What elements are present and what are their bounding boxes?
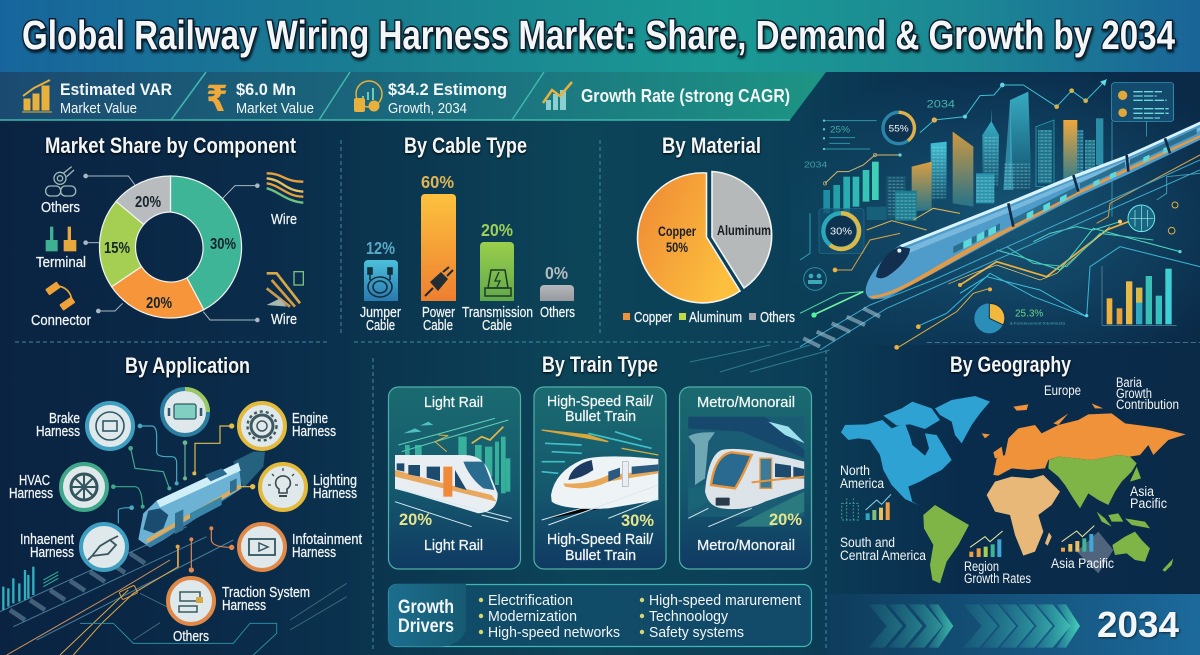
donut values: 20% — [146, 295, 172, 312]
card: high speed rail: High-Speed Rail/ — [547, 532, 654, 548]
map labels: Region — [964, 559, 999, 574]
KPI: market value: $6.0 Mn — [236, 80, 296, 99]
world map — [841, 396, 1186, 583]
map labels: North — [840, 463, 870, 478]
bar labels: Jumper — [360, 305, 401, 321]
bar labels: Transmission — [462, 305, 533, 321]
map labels: Growth — [1116, 386, 1152, 401]
card: metro monorail: Metro/Monorail — [697, 395, 795, 411]
mini chart icons — [842, 494, 1094, 557]
heading: By Geography — [950, 352, 1072, 377]
map labels: Europe — [1044, 383, 1081, 398]
icon: harness connector — [81, 524, 127, 570]
driver list: Safety systems — [649, 625, 744, 641]
panel: by material — [623, 133, 795, 326]
track — [800, 160, 1200, 350]
bar labels: Cable — [482, 318, 512, 334]
ring 55%: 55% — [889, 123, 909, 133]
labels: HVAC — [19, 473, 50, 489]
labels: Brake — [49, 411, 80, 427]
driver list — [488, 593, 801, 641]
labels: Harness — [9, 486, 53, 502]
legend: Copper — [634, 310, 672, 326]
icon: infotainment screen — [239, 524, 285, 570]
icon: power plug — [425, 267, 453, 296]
labels: Lighting — [313, 473, 357, 489]
right bar chart — [1102, 266, 1177, 325]
pie chart — [638, 172, 772, 303]
icon: HVAC wheel — [61, 464, 107, 510]
labels: Traction System — [222, 585, 310, 601]
heading: By Material — [662, 133, 761, 158]
panel: by application — [0, 353, 362, 655]
card: high speed rail: High-Speed Rail/ — [547, 394, 654, 410]
icon: engine harness gear — [239, 403, 285, 449]
card: high speed rail: Bullet Train — [565, 409, 636, 425]
icon: jumper cable — [368, 268, 392, 297]
icon: terminals — [46, 227, 76, 251]
map labels: Growth Rates — [964, 571, 1031, 586]
legend: Aluminum — [689, 310, 742, 326]
bar labels — [360, 305, 575, 334]
rising trend line — [920, 79, 1107, 133]
circuit lines — [800, 155, 1200, 350]
hero glow — [790, 70, 1200, 345]
card: light rail: Light Rail — [424, 538, 483, 554]
icon: cable coils — [46, 167, 76, 196]
icon: transmission drive — [485, 270, 511, 296]
people icon — [804, 268, 826, 290]
KPI: growth rate: Growth Rate (strong CAGR) — [581, 86, 790, 106]
KPI: forecast: $34.2 Estimong — [388, 80, 507, 99]
ring 30% — [819, 209, 864, 254]
speed lines — [690, 345, 830, 372]
card: metro monorail: Metro/Monorail — [697, 538, 795, 554]
heading — [398, 596, 454, 637]
icon: traction system — [168, 578, 214, 624]
driver list: Technoology — [649, 609, 729, 625]
values: 0% — [545, 263, 568, 283]
KPI: market value: ₹ — [206, 79, 228, 120]
labels: Terminal — [36, 255, 86, 271]
chevrons — [868, 604, 1080, 648]
train — [138, 452, 265, 547]
map labels: Asia — [1130, 484, 1154, 499]
icon: wiring loom — [267, 272, 303, 307]
labels: Inhaenent — [20, 532, 74, 548]
panel: by cable type — [360, 133, 575, 334]
map labels: Central America — [840, 548, 926, 563]
map labels: South and — [840, 535, 895, 550]
KPI: forecast: Growth, 2034 — [388, 101, 467, 117]
labels: Others — [41, 200, 80, 216]
panel: by train type — [388, 345, 830, 569]
labels: Harness — [292, 424, 336, 440]
title banner — [0, 0, 1200, 72]
icon: connector — [45, 281, 75, 311]
skyline — [867, 92, 1103, 221]
globe chip — [1128, 205, 1155, 232]
icon: engine — [162, 389, 208, 435]
donut values: 15% — [104, 240, 130, 257]
labels — [31, 200, 297, 329]
card: metro monorail — [680, 387, 812, 569]
footer band — [827, 594, 1200, 655]
label 2034 left: 2034 — [804, 160, 828, 170]
dashboard panel — [1112, 83, 1174, 217]
KPI strip — [0, 72, 826, 120]
values: 60% — [421, 172, 454, 192]
labels: Harness — [36, 424, 80, 440]
card: metro monorail: 20% — [769, 510, 802, 529]
labels — [9, 411, 362, 645]
panel: market share by component — [31, 133, 303, 329]
values: 20% — [481, 220, 513, 240]
map labels: Contribution — [1116, 397, 1179, 412]
heading: Market Share by Component — [45, 133, 297, 158]
small pie — [974, 303, 1066, 333]
labels: Wire — [271, 312, 297, 328]
KPI: growth rate — [543, 82, 790, 110]
labels: Harness — [313, 486, 357, 502]
driver list: High-speed marurement — [649, 593, 801, 609]
ring 30%: 30% — [830, 227, 852, 238]
labels: Harness — [222, 598, 266, 614]
left bar chart — [823, 153, 902, 213]
hero illustration: train and city — [800, 79, 1200, 350]
icon: wire bundle — [267, 173, 303, 203]
card: light rail: Light Rail — [424, 395, 483, 411]
map labels: Baria — [1116, 375, 1142, 390]
pie labels: 50% — [666, 240, 688, 255]
driver list: Electrification — [488, 593, 573, 609]
donut values: 20% — [135, 194, 161, 211]
heading: Drivers — [398, 615, 454, 637]
pie labels: Aluminum — [717, 223, 771, 238]
KPI: market value — [206, 79, 314, 120]
panel: by geography — [840, 352, 1186, 586]
connector lines — [111, 423, 255, 573]
labels: Harness — [292, 545, 336, 561]
donut values: 30% — [210, 236, 236, 253]
card: high speed rail: Bullet Train — [565, 548, 636, 564]
labels: Others — [173, 629, 209, 645]
ring 55% — [883, 112, 914, 144]
dashed divider — [927, 342, 1200, 344]
heading: By Train Type — [542, 352, 658, 377]
driver list: Modernization — [488, 609, 577, 625]
map labels: America — [840, 476, 884, 491]
small pie: § Fundoxunent fotonhesta — [1010, 322, 1066, 326]
donut chart — [99, 176, 241, 318]
labels: Wire — [271, 212, 297, 228]
labels: Connector — [31, 313, 91, 329]
card: light rail: 20% — [399, 510, 432, 529]
growth drivers panel — [388, 584, 812, 646]
KPI: estimated VAR: Estimated VAR — [60, 80, 172, 99]
card: light rail — [388, 387, 520, 569]
legend: Others — [760, 310, 795, 326]
legend — [623, 310, 795, 326]
section dividers — [15, 140, 826, 650]
track and circuit background — [0, 527, 347, 655]
bar chart — [364, 194, 574, 301]
bar labels: Others — [540, 305, 575, 321]
map labels: Pacific — [1130, 496, 1167, 511]
values — [366, 172, 568, 283]
heading: By Application — [125, 353, 250, 378]
label 2034 top: 2034 — [927, 99, 955, 111]
labels: Engine — [292, 411, 328, 427]
bar labels: Cable — [366, 318, 395, 334]
bar labels: Cable — [423, 318, 453, 334]
leader lines — [83, 174, 260, 322]
labels: Infotainment — [292, 532, 362, 548]
labels: Harness — [30, 545, 74, 561]
map labels: Asia Pacific — [1051, 556, 1114, 571]
bar labels: Power — [422, 305, 455, 321]
pie labels — [658, 223, 771, 255]
donut values — [104, 194, 236, 312]
KPI: estimated VAR — [22, 80, 172, 117]
year: 2034 — [1097, 604, 1179, 645]
card: high speed rail: 30% — [621, 511, 654, 530]
pie labels: Copper — [658, 224, 697, 239]
KPI: estimated VAR: Market Value — [60, 101, 137, 117]
25% list: 25% — [830, 125, 850, 135]
KPI: market value: Market Value — [236, 101, 314, 117]
bullets — [479, 598, 644, 634]
heading: By Cable Type — [404, 133, 527, 158]
KPI: forecast — [354, 80, 507, 117]
heading: Growth — [398, 596, 454, 618]
card: high speed rail — [534, 387, 666, 569]
25% list — [823, 119, 877, 150]
high speed train — [866, 122, 1200, 299]
values: 12% — [366, 238, 395, 258]
small pie: 25.3% — [1015, 309, 1044, 320]
map labels — [840, 375, 1179, 586]
icon: brake harness — [87, 403, 133, 449]
icon: lighting bulb — [260, 464, 306, 510]
driver list: High-speed networks — [488, 625, 620, 641]
